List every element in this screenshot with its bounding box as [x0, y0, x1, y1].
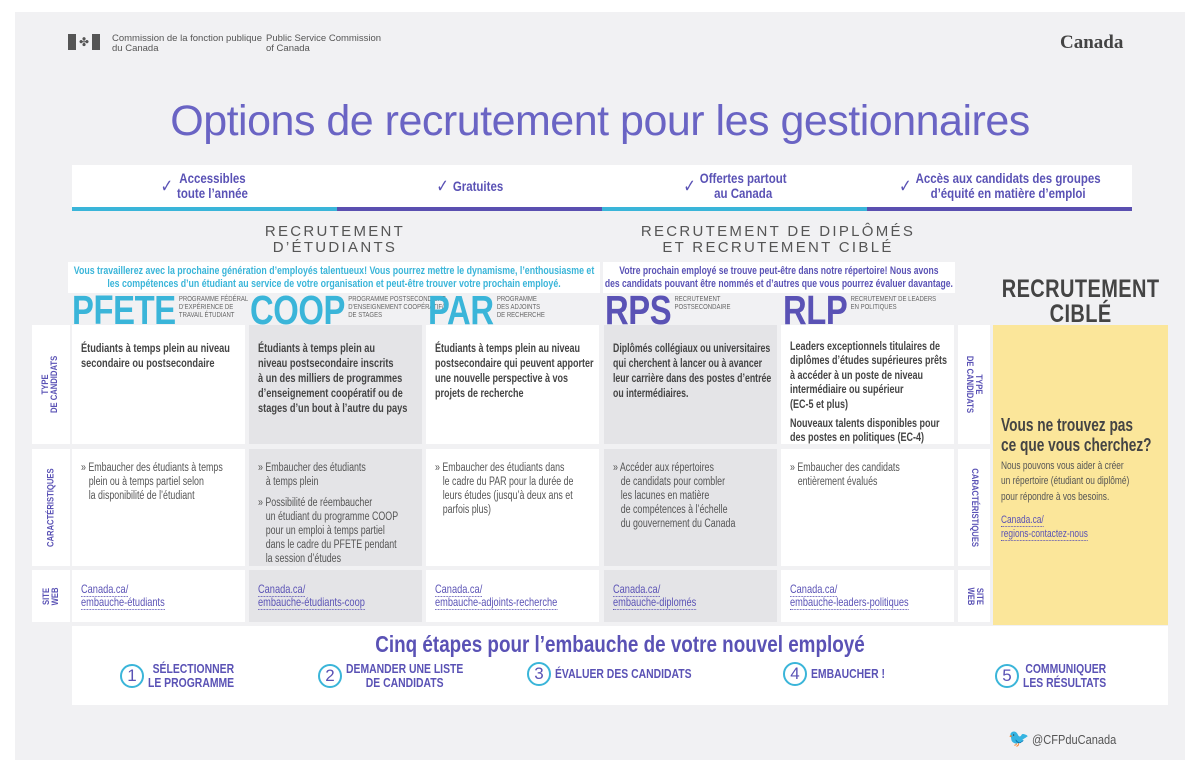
step 5: COMMUNIQUER	[1025, 661, 1106, 676]
panel: targeted recruitment callout: regions-contactez-nous	[1001, 528, 1088, 540]
cells: site row: embauche-étudiants	[81, 595, 165, 609]
text: du gouvernement du Canada	[621, 518, 735, 530]
text: les lacunes en matière	[621, 490, 709, 502]
step 5	[995, 661, 1106, 690]
heading: targeted recruitment	[1002, 275, 1159, 328]
step 3	[527, 662, 692, 686]
text: un étudiant du programme COOP	[266, 511, 398, 523]
text: diplômes d’études supérieures prêts	[790, 353, 947, 367]
intro: students: les compétences d’un étudiant au service de votre organisation et peut-être trouver votre prochain employé.	[107, 278, 561, 290]
cells: caracteristiques row: la disponibilité de l’étudiant	[89, 490, 195, 502]
intro: graduates	[603, 262, 955, 293]
title: Options de recrutement pour les gestionnaires	[170, 97, 1030, 145]
step 4: 4	[790, 664, 800, 683]
heading: student recruitment: RECRUTEMENT	[265, 223, 405, 240]
text: Diplômés collégiaux ou universitaires	[613, 341, 770, 355]
text: Nouveaux talents disponibles pour	[790, 416, 940, 430]
text: » Embaucher des candidats	[790, 462, 900, 474]
row label: site: WEB	[50, 587, 60, 605]
benefit 4: ✓	[899, 176, 911, 196]
program: RLP: EN POLITIQUES	[851, 302, 897, 311]
text: niveau postsecondaire inscrits	[258, 356, 394, 370]
text: » Embaucher des étudiants	[258, 462, 366, 474]
text: (EC-5 et plus)	[790, 397, 848, 411]
cells: caracteristiques row: plein ou à temps partiel selon	[89, 476, 204, 488]
cells: type row: secondaire ou postsecondaire	[81, 356, 215, 370]
panel: targeted recruitment callout: pour répondre à vos besoins.	[1001, 491, 1109, 503]
text: embauche-diplomés	[613, 595, 696, 609]
cells: type row: Étudiants à temps plein au niveau	[81, 341, 230, 355]
text: de compétences à l’échelle	[621, 504, 728, 516]
program: PFETE: PROGRAMME FÉDÉRAL	[179, 294, 248, 303]
text: dans le cadre du PFETE pendant	[266, 539, 397, 551]
benefit 2	[436, 176, 503, 196]
benefit 3: Offertes partout	[699, 170, 786, 186]
heading: targeted recruitment: RECRUTEMENT	[1002, 275, 1159, 303]
cells: caracteristiques row	[72, 449, 245, 566]
text: Étudiants à temps plein au	[258, 341, 375, 355]
benefits bar	[72, 165, 1132, 211]
program: PAR	[428, 287, 545, 333]
header: PSC logo	[68, 33, 381, 54]
intro: students: Vous travaillerez avec la prochaine génération d’employés talentueux! Vous pourrez mettre le dynamisme, l’enthousiasme et	[74, 265, 594, 277]
program: COOP: PROGRAMME POSTSECONDAIRE	[348, 294, 446, 303]
benefit 1: Accessibles	[180, 170, 246, 186]
cells: caracteristiques row: » Embaucher des étudiants à temps	[81, 462, 223, 474]
step 3: ÉVALUER DES CANDIDATS	[555, 666, 692, 681]
step 1: 1	[127, 666, 137, 685]
text: » Accéder aux répertoires	[613, 462, 714, 474]
text: des postes en politiques (EC-4)	[790, 430, 924, 444]
intro: graduates: des candidats pouvant être nommés et d’autres que vous pourrez évaluer davantage.	[605, 278, 953, 290]
text: stages d’un bout à l’autre du pays	[258, 401, 407, 415]
program: RPS: RECRUTEMENT	[674, 294, 720, 303]
text: embauche-leaders-politiques	[790, 595, 909, 609]
text: d’enseignement coopératif ou de	[258, 386, 403, 400]
text: la session d’études	[266, 553, 341, 565]
panel: targeted recruitment callout	[993, 325, 1168, 625]
step 2: DEMANDER UNE LISTE	[346, 661, 463, 676]
heading: graduate recruitment: RECRUTEMENT DE DIPLÔMÉS	[641, 223, 915, 240]
text: ou intermédiaires.	[613, 386, 688, 400]
row label: type: DE CANDIDATS	[50, 356, 60, 413]
twitter handle: @CFPduCanada	[1032, 732, 1116, 746]
panel: targeted recruitment callout: Vous ne trouvez pas	[1001, 415, 1133, 435]
text: leurs études (jusqu’à deux ans et	[443, 490, 573, 502]
step 5: LES RÉSULTATS	[1023, 675, 1106, 690]
text: SITE	[974, 587, 984, 604]
header: PSC logo: of Canada	[266, 43, 310, 54]
text: à un des milliers de programmes	[258, 371, 402, 385]
benefit 4: d’équité en matière d’emploi	[930, 185, 1085, 201]
text: » Possibilité de réembaucher	[258, 497, 372, 509]
heading: graduate recruitment: ET RECRUTEMENT CIBLÉ	[662, 239, 894, 256]
program: RPS: POSTSECONDAIRE	[674, 302, 730, 311]
step 1: LE PROGRAMME	[148, 675, 234, 690]
program: PAR: PAR	[428, 287, 494, 333]
text: qui cherchent à lancer ou à avancer	[613, 356, 762, 370]
step 4	[783, 662, 885, 686]
heading: targeted recruitment: CIBLÉ	[1050, 300, 1112, 328]
text: le cadre du PAR pour la durée de	[443, 476, 573, 488]
panel: targeted recruitment callout: ce que vous cherchez?	[1001, 435, 1152, 455]
program: PAR: DES ADJOINTS	[497, 302, 540, 311]
program: RLP: RLP	[783, 287, 847, 333]
twitter handle	[1008, 729, 1116, 748]
icon: flag: ✤	[79, 35, 89, 49]
text: embauche-étudiants-coop	[258, 595, 365, 609]
panel: five steps	[72, 626, 1168, 705]
header: PSC logo: du Canada	[112, 43, 158, 54]
step 1: SÉLECTIONNER	[153, 661, 234, 676]
heading: student recruitment	[265, 223, 405, 256]
program: RLP	[783, 287, 936, 333]
step 1	[120, 661, 234, 690]
text: Canada.ca/	[435, 582, 482, 596]
icon: flag	[68, 34, 100, 50]
row label: site: SITE	[41, 588, 51, 605]
row label: type: TYPE	[41, 375, 51, 395]
text: CARACTÉRISTIQUES	[970, 468, 980, 547]
Canada wordmark: Canada	[1060, 32, 1123, 53]
intro: graduates: Votre prochain employé se trouve peut-être dans notre répertoire! Nous avons	[619, 265, 939, 277]
program: COOP: COOP	[250, 287, 345, 333]
step 3: 3	[534, 664, 544, 683]
benefit 2: ✓	[436, 176, 448, 196]
step 5: 5	[1002, 666, 1012, 685]
benefit 3	[683, 170, 786, 201]
text: leur carrière dans des postes d’entrée	[613, 371, 771, 385]
text: entièrement évalués	[798, 476, 877, 488]
heading: graduate recruitment	[641, 222, 915, 256]
benefit 3: au Canada	[714, 185, 772, 201]
text: parfois plus)	[443, 504, 491, 516]
step 2: DE CANDIDATS	[366, 675, 444, 690]
program: PFETE: TRAVAIL ÉTUDIANT	[179, 310, 234, 319]
benefit 4: Accès aux candidats des groupes	[915, 170, 1100, 186]
program: COOP: D’ENSEIGNEMENT COOPÉRATIF/	[348, 302, 444, 311]
program: COOP	[250, 287, 446, 333]
twitter handle: 🐦	[1008, 729, 1029, 748]
text: de candidats pour combler	[621, 476, 725, 488]
panel: targeted recruitment callout: Nous pouvons vous aider à créer	[1001, 460, 1124, 472]
benefit 1: ✓	[161, 176, 173, 196]
program: RLP: RECRUTEMENT DE LEADERS	[851, 294, 936, 303]
right labels	[958, 325, 990, 444]
text: à temps plein	[266, 476, 318, 488]
program: PFETE: PFETE	[72, 287, 176, 333]
benefit 4	[899, 170, 1100, 201]
cells: type row	[72, 325, 245, 444]
row label: caracteristiques	[32, 449, 70, 566]
text: intermédiaire ou supérieur	[790, 382, 904, 396]
text: Leaders exceptionnels titulaires de	[790, 339, 940, 353]
row label: site	[32, 570, 70, 622]
text: pour un emploi à temps partiel	[266, 525, 385, 537]
text: à accéder à un poste de niveau	[790, 368, 923, 382]
step 2: 2	[325, 666, 335, 685]
right labels: DE CANDIDATS	[965, 356, 975, 413]
program: PAR: PROGRAMME	[497, 294, 537, 303]
step 2	[318, 661, 463, 690]
row label: caracteristiques: CARACTÉRISTIQUES	[45, 468, 55, 547]
text: une nouvelle perspective à vos	[435, 371, 568, 385]
benefit 2: Gratuites	[453, 178, 503, 194]
benefit 1: toute l’année	[177, 185, 248, 201]
benefit 1	[161, 170, 248, 201]
text: postsecondaire qui peuvent apporter	[435, 356, 594, 370]
program: PFETE: D’EXPÉRIENCE DE	[179, 302, 233, 311]
text: Étudiants à temps plein au niveau	[435, 341, 580, 355]
header: PSC logo: Public Service Commission	[266, 33, 381, 44]
row label: type	[32, 325, 70, 444]
text: embauche-adjoints-recherche	[435, 595, 557, 609]
program: RPS: RPS	[605, 287, 671, 333]
panel: targeted recruitment callout: un répertoire (étudiant ou diplômé)	[1001, 475, 1129, 487]
steps heading: Cinq étapes pour l’embauche de votre nouvel employé	[375, 631, 865, 657]
program: PAR: DE RECHERCHE	[497, 310, 545, 319]
header: PSC logo: Commission de la fonction publique	[112, 33, 262, 44]
text: Canada.ca/	[613, 582, 660, 596]
text: » Embaucher des étudiants dans	[435, 462, 564, 474]
text: WEB	[965, 587, 975, 605]
intro: students	[68, 262, 600, 293]
cells: site row: Canada.ca/	[81, 582, 128, 596]
heading: student recruitment: D’ÉTUDIANTS	[273, 239, 397, 256]
text: Canada.ca/	[790, 582, 837, 596]
benefit 3: ✓	[683, 176, 695, 196]
step 4: EMBAUCHER !	[811, 666, 885, 681]
program: RPS	[605, 287, 730, 333]
program: PFETE	[72, 287, 248, 333]
right labels: TYPE	[974, 374, 984, 394]
text: projets de recherche	[435, 386, 524, 400]
panel: targeted recruitment callout: Canada.ca/	[1001, 514, 1044, 526]
text: Canada.ca/	[258, 582, 305, 596]
program: COOP: DE STAGES	[348, 310, 382, 319]
cells: site row	[72, 570, 245, 622]
